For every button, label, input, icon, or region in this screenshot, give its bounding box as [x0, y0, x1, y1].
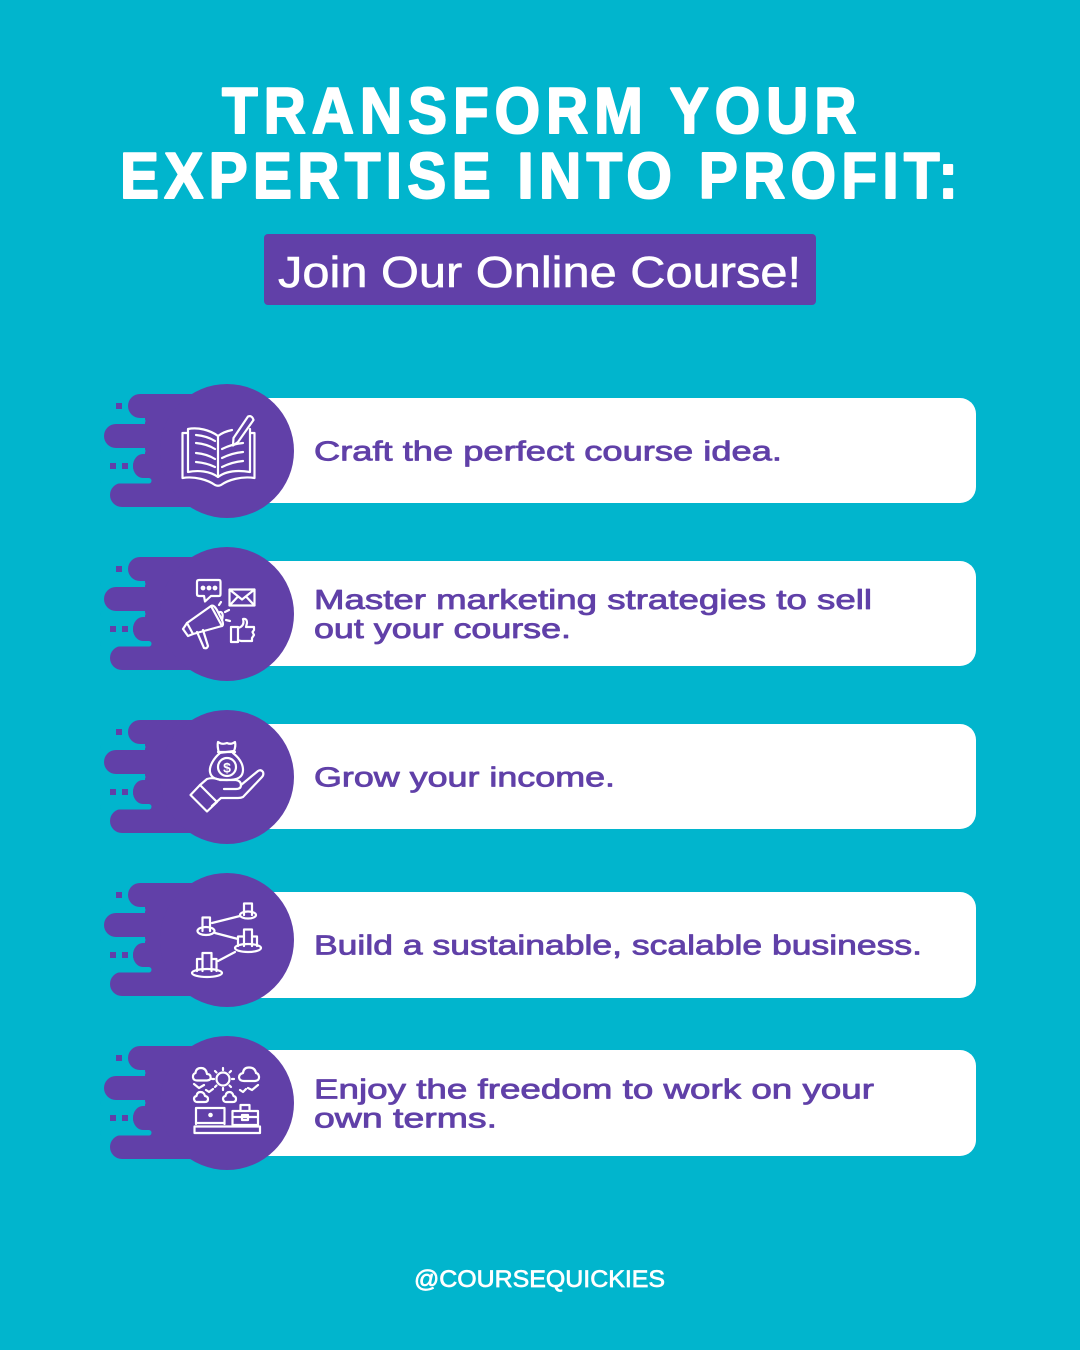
icon: hand holding money bag	[190, 742, 263, 812]
icon: sun, clouds, laptop and briefcase	[193, 1068, 260, 1133]
title: EXPERTISE INTO PROFIT:	[120, 140, 958, 213]
card 1	[240, 398, 976, 503]
card 5	[240, 1050, 976, 1156]
card 2	[240, 561, 976, 666]
card 3	[240, 724, 976, 829]
title	[120, 75, 958, 213]
subtitle banner	[264, 234, 816, 305]
step 1 text: Craft the perfect course idea.	[314, 436, 782, 466]
purple blob 1	[100, 384, 294, 518]
step 2	[100, 547, 976, 681]
step 5 text: own terms.	[314, 1102, 497, 1134]
dollar sign: $	[223, 760, 231, 776]
step 2 text: Master marketing strategies to sell	[314, 584, 872, 615]
title: TRANSFORM YOUR	[222, 75, 857, 148]
purple blob 3	[100, 710, 294, 844]
step 2 text	[314, 584, 872, 644]
step 1	[100, 384, 976, 518]
icon: open book with pen	[182, 416, 254, 486]
step 3	[100, 710, 976, 844]
footer handle: @COURSEQUICKIES	[414, 1266, 665, 1293]
step 4 text: Build a sustainable, scalable business.	[314, 930, 922, 960]
purple blob 5	[100, 1036, 294, 1170]
icon: megaphone, speech bubble, mail and thumbs up	[183, 580, 254, 648]
step 5 text	[314, 1074, 874, 1134]
purple blob 2	[100, 547, 294, 681]
step 4	[100, 873, 976, 1007]
step 5 text: Enjoy the freedom to work on your	[314, 1074, 874, 1104]
step 2 text: out your course.	[314, 613, 571, 644]
card 4	[240, 892, 976, 998]
subtitle banner: Join Our Online Course!	[278, 248, 801, 297]
purple blob 4	[100, 873, 294, 1007]
step 3 text: Grow your income.	[314, 762, 615, 792]
icon: connected bar charts network	[192, 904, 261, 977]
step 5	[100, 1036, 976, 1170]
